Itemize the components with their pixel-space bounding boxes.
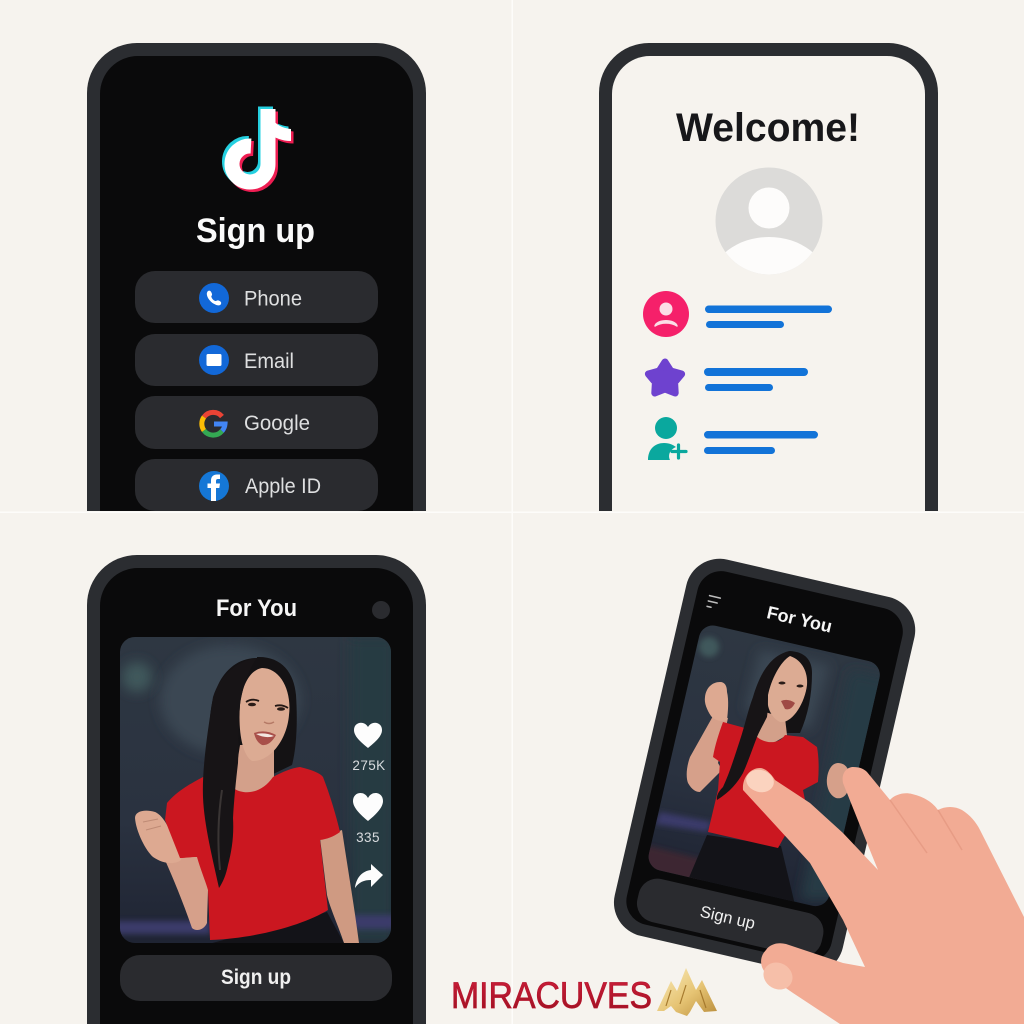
fingernail: thumb: [759, 957, 797, 995]
panel: welcome phone: [599, 43, 938, 563]
hair back: [210, 657, 297, 774]
icon: share arrow: [355, 864, 383, 888]
neck: [757, 712, 787, 742]
icon: heart likes: 275K: [352, 758, 386, 773]
icon: heart likes: [352, 723, 386, 773]
video: woman tilted: [640, 637, 895, 905]
button: google: [135, 396, 378, 449]
icon: heart comments: 335: [356, 830, 380, 845]
button: sign up: Sign up: [221, 966, 291, 989]
list row: profile: [643, 291, 832, 337]
heading: welcome: Welcome!: [676, 106, 860, 150]
button: sign up tilted: Sign up: [698, 903, 757, 933]
hair back tilted: [768, 651, 812, 733]
right hand: [827, 763, 850, 798]
raised arm: [687, 716, 728, 792]
icon: profile avatar: [716, 168, 822, 274]
phone frame: [607, 552, 922, 981]
hair front lock: [202, 686, 244, 888]
panel: sign up phone: [87, 43, 426, 563]
button: sign up: [120, 955, 392, 1001]
panel: for you phone: [87, 555, 426, 1024]
button: phone: Phone: [244, 288, 302, 310]
face: [240, 668, 289, 761]
logo: miracuves: MIRACUVES: [451, 975, 652, 1016]
t-shirt tilted: [708, 722, 819, 848]
button: phone: [135, 271, 378, 323]
hand: [135, 811, 181, 863]
button: google: Google: [244, 412, 310, 435]
icon: gold mountain: [657, 968, 717, 1016]
icon: tiktok logo: [230, 106, 294, 184]
panel: tilted phone: [607, 552, 922, 981]
heading: for you tilted: For You: [765, 602, 834, 637]
button: email: [135, 334, 378, 386]
camera dot: [372, 601, 390, 619]
heading: for you: For You: [216, 595, 297, 622]
t-shirt: [165, 767, 340, 940]
pants tilted: [688, 835, 795, 905]
fingernail: index: [744, 767, 776, 795]
pants: [213, 912, 344, 943]
list row: star: [648, 362, 808, 393]
button: email: Email: [244, 350, 294, 373]
heading: sign up: Sign up: [196, 212, 315, 250]
illustration: tapping hand: [743, 767, 1024, 1024]
button: sign up tilted: [633, 875, 827, 960]
video: dancing woman: [115, 637, 396, 945]
icon: heart comments: [353, 793, 383, 845]
face tilted: [768, 656, 807, 722]
finger creases: [890, 800, 962, 853]
neck and arms: [235, 745, 274, 792]
hair front tilted: [717, 651, 790, 800]
button: apple id: [135, 459, 378, 511]
list row: add friend: [648, 417, 818, 460]
button: apple id: Apple ID: [245, 475, 321, 498]
